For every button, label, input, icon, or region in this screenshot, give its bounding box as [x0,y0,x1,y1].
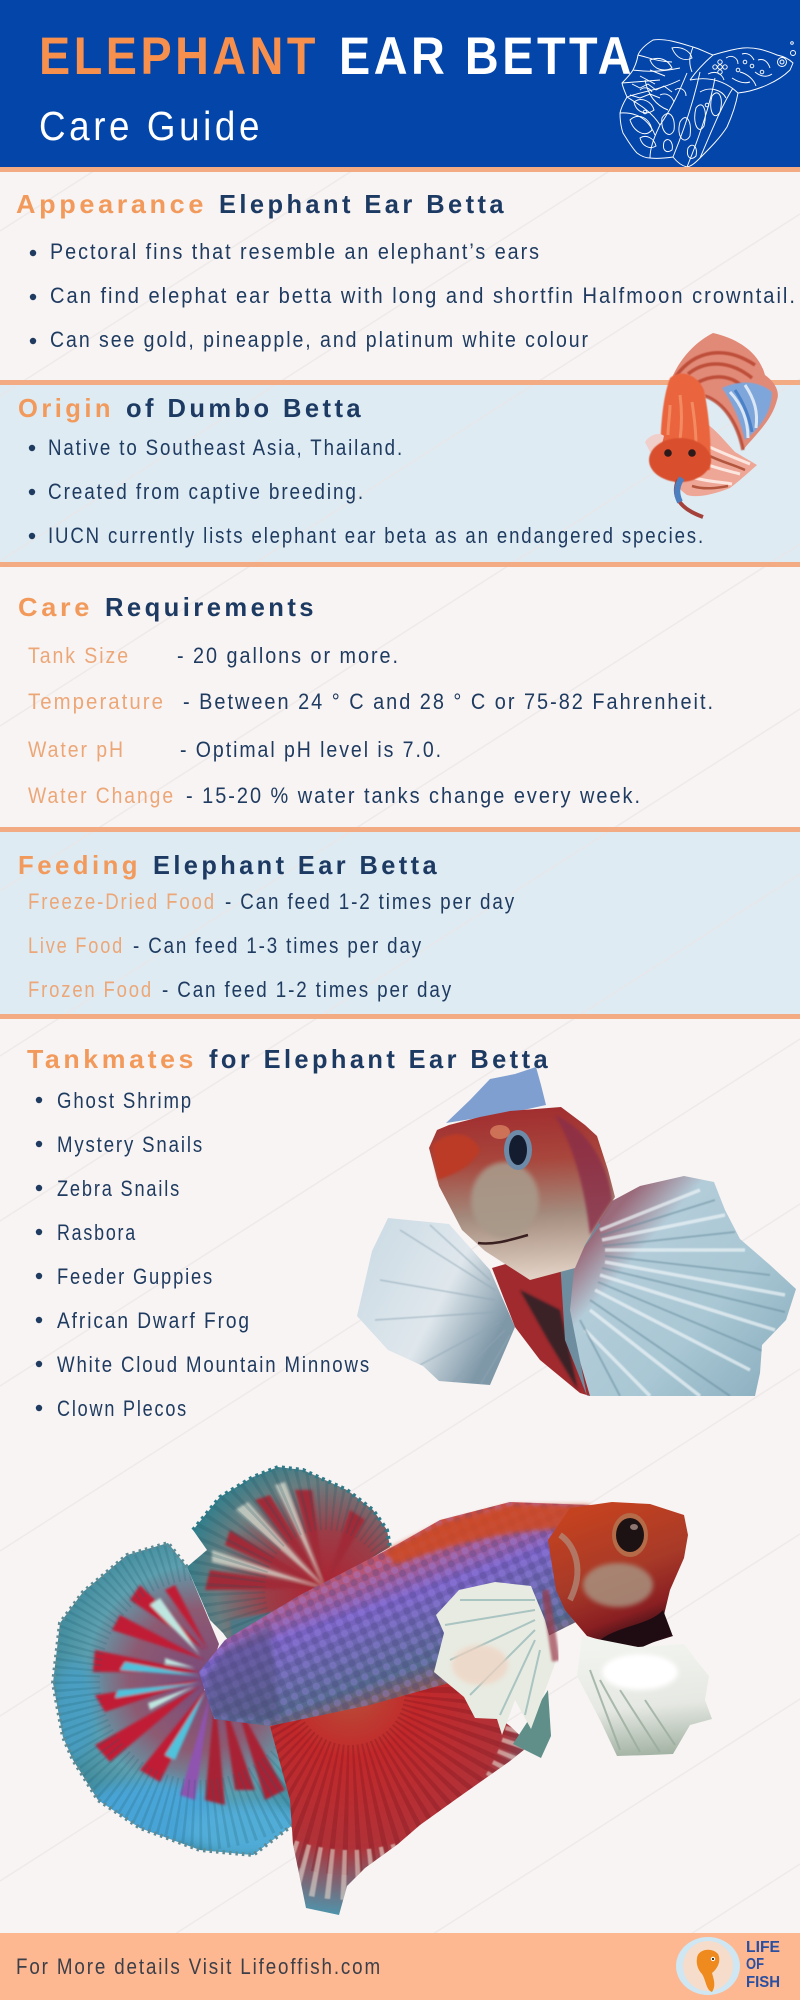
title: EAR BETTA [339,27,635,86]
panel: origin [18,333,778,548]
tankmates list: African Dwarf Frog [57,1308,251,1333]
heading: care requirements: Requirements [105,592,317,622]
footer [0,1933,800,2000]
photo: large betta side view [53,1467,712,1915]
row: temperature: - Between 24 ° C and 28 ° C or 75-82 Fahrenheit. [183,689,715,714]
illustration: orange betta [645,333,778,517]
logo text: LIFE [746,1939,780,1956]
row: water change: - 15-20 % water tanks change every week. [186,783,642,808]
tail [668,333,778,450]
tankmates list [36,1088,371,1421]
subtitle: Care Guide [39,103,263,149]
panel: tankmates [27,1044,796,1421]
head [548,1502,688,1648]
logo text: FISH [746,1974,780,1991]
heading: tankmates [27,1044,551,1074]
dorsal fin [187,1465,392,1639]
row: freeze-dried food: Freeze-Dried Food [28,889,216,914]
heading: tankmates: Tankmates [27,1044,197,1074]
heading: feeding: Elephant Ear Betta [153,850,440,880]
tankmates list: Feeder Guppies [57,1264,214,1289]
footer text: For More details Visit Lifeoffish.com [16,1954,382,1979]
tail fan [51,1542,292,1857]
origin bullets: Native to Southeast Asia, Thailand. [48,435,404,460]
heading: appearance: Elephant Ear Betta [219,189,507,219]
heading: origin: Origin [18,393,114,423]
belly [492,1245,590,1396]
row: live food [28,933,423,958]
row: tank size [28,643,400,668]
tankmates list: White Cloud Mountain Minnows [57,1352,371,1377]
logo text [746,1939,780,1991]
left fin [357,1218,515,1385]
head [429,1107,615,1280]
body [199,1502,600,1726]
row: frozen food [28,977,453,1002]
panel: header [0,0,800,167]
heading: tankmates: for Elephant Ear Betta [209,1044,551,1074]
front white fin [577,1636,712,1756]
origin bullets [29,435,705,548]
row: freeze-dried food: - Can feed 1-2 times per day [225,889,516,914]
heading: origin [18,393,364,423]
panel: care requirements [18,592,715,808]
body [660,374,711,470]
row: live food: - Can feed 1-3 times per day [133,933,423,958]
right fin [561,1176,796,1396]
barbel tail wisp [676,480,703,517]
heading: feeding: Feeding [18,850,141,880]
logo text: OF [746,1956,764,1973]
appearance bullets [30,239,797,352]
tankmates list: Mystery Snails [57,1132,204,1157]
heading: appearance [16,189,507,219]
row: tank size: Tank Size [28,643,130,668]
title: ELEPHANT [39,27,319,86]
row: water change [28,783,642,808]
row: temperature: Temperature [28,689,165,714]
row: frozen food: - Can feed 1-2 times per day [162,977,453,1002]
head [645,434,664,452]
logo [676,1937,780,1995]
panel: origin background [0,385,800,562]
pectoral fin [434,1582,556,1735]
eye [490,1125,532,1170]
heading: appearance: Appearance [16,189,207,219]
heading: feeding [18,850,440,880]
appearance bullets: Can see gold, pineapple, and platinum white colour [50,327,590,352]
icon: fish bowl [676,1937,740,1995]
tankmates list: Clown Plecos [57,1396,188,1421]
tankmates list: Zebra Snails [57,1176,181,1201]
panel: feeding background [0,832,800,1014]
row: tank size: - 20 gallons or more. [177,643,400,668]
heading: care requirements: Care [18,592,93,622]
panel: feeding [18,850,516,1002]
icon: mandala betta outline [620,40,796,167]
row: frozen food: Frozen Food [28,977,153,1002]
row: freeze-dried food [28,889,516,914]
anal fin [270,1684,524,1915]
tankmates list: Rasbora [57,1220,137,1245]
panel: appearance [16,189,797,352]
heading: origin: of Dumbo Betta [126,393,364,423]
row: live food: Live Food [28,933,124,958]
origin bullets: Created from captive breeding. [48,479,365,504]
divider: header [0,167,800,172]
lower fin [673,420,757,496]
title [39,27,635,86]
row: water pH [28,737,443,762]
photo: betta front view [357,1067,796,1396]
small rear fin [513,1690,551,1758]
eye [612,1513,648,1557]
appearance bullets: Pectoral fins that resemble an elephant’s ears [50,239,541,264]
tankmates list: Ghost Shrimp [57,1088,193,1113]
row: water change: Water Change [28,783,175,808]
dorsal fin [446,1067,546,1123]
row: water pH: - Optimal pH level is 7.0. [180,737,443,762]
row: water pH: Water pH [28,737,125,762]
